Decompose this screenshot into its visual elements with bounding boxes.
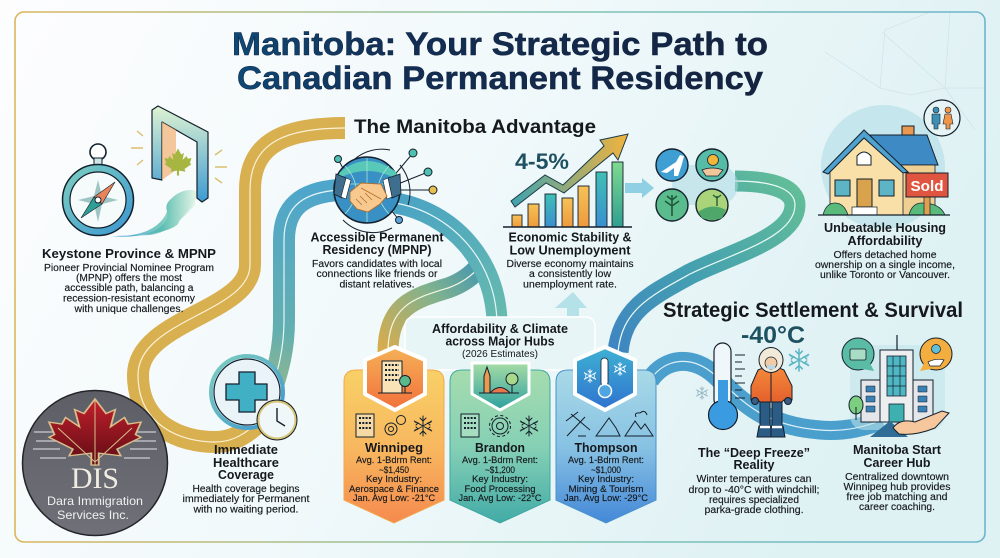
icon: house sold xyxy=(818,100,960,229)
text: Deep Freeze Reality: Reality xyxy=(734,458,775,472)
text: Economic Stability: unemployment rate. xyxy=(523,280,617,290)
text: Immediate Healthcare Coverage: Healthcare xyxy=(213,456,279,470)
icon: career hub building xyxy=(842,335,952,437)
text: Keystone Province & MPNP: with unique challenges. xyxy=(73,304,184,315)
icon: healthcare cross and clock xyxy=(211,356,297,440)
panel: hubs header xyxy=(405,317,595,370)
icon: handshake globe xyxy=(334,149,437,233)
text: Deep Freeze Reality: The “Deep Freeze” xyxy=(698,446,810,460)
text: Manitoba Start Career Hub: Centralized downtown xyxy=(845,472,949,483)
text: Accessible Permanent Residency: Residency (MPNP) xyxy=(322,243,432,257)
text: Thompson facts: Avg. 1-Bdrm Rent: xyxy=(568,455,644,466)
text: Unbeatable Housing Affordability: Affordability xyxy=(848,234,923,248)
text: Accessible Permanent Residency xyxy=(310,230,444,290)
text: Thompson facts: Mining & Tourism xyxy=(568,484,644,495)
text: Manitoba Start Career Hub xyxy=(844,443,950,513)
text: Manitoba Start Career Hub: Manitoba Start xyxy=(853,443,942,457)
text: Unbeatable Housing Affordability: Offers detached home xyxy=(834,250,937,261)
text: Economic Stability xyxy=(506,230,634,290)
text: Manitoba Start Career Hub: free job matching and xyxy=(846,492,948,503)
icon: Winnipeg tower xyxy=(378,361,412,393)
text: Thompson facts: Key Industry: xyxy=(578,474,634,485)
panel: Thompson xyxy=(556,347,656,523)
text: Immediate Healthcare Coverage: Immediate xyxy=(214,443,278,457)
icons: Brandon row xyxy=(461,414,538,437)
text: Deep Freeze Reality xyxy=(688,446,820,516)
text: Brandon facts: Brandon xyxy=(475,440,525,455)
text: Keystone Province & MPNP: recession-resistant economy xyxy=(63,294,195,304)
text: Thompson facts: ~$1,000 xyxy=(591,465,621,476)
text: Accessible Permanent Residency: distant relatives. xyxy=(340,280,414,290)
text: Accessible Permanent Residency: Favors candidates with local xyxy=(312,259,442,270)
text: Deep Freeze Reality: parka-grade clothing. xyxy=(704,505,804,516)
panel: hubs header: Affordability & Climate xyxy=(432,321,568,336)
icons: Winnipeg row xyxy=(356,414,432,437)
text: Deep Freeze Reality: drop to -40°C with windchill; xyxy=(688,485,820,496)
arrow: toward industry icons xyxy=(625,178,654,198)
road: gold path xyxy=(138,128,345,442)
text: Keystone Province & MPNP xyxy=(42,247,216,315)
icons: Thompson row xyxy=(566,411,653,436)
logo: Dara Immigration Services: Services Inc. xyxy=(57,508,129,522)
road: central teal path xyxy=(395,203,497,325)
text: Unbeatable Housing Affordability: ownership on a single income, xyxy=(815,260,955,271)
text: Immediate Healthcare Coverage xyxy=(182,443,310,516)
road: lower blue path xyxy=(650,361,882,431)
text: Thompson facts xyxy=(564,440,648,504)
road: olive connector xyxy=(388,266,480,352)
text: Manitoba Start Career Hub: career coaching. xyxy=(859,502,935,513)
text: Deep Freeze Reality: Winter temperatures can xyxy=(696,474,812,485)
text: Accessible Permanent Residency: Accessible Permanent xyxy=(310,230,444,244)
logo: Dara Immigration Services xyxy=(22,390,168,536)
text: Winnipeg facts: Avg. 1-Bdrm Rent: xyxy=(356,455,432,466)
text: Winnipeg facts: Key Industry: xyxy=(366,474,422,485)
logo: Dara Immigration Services: Dara Immigration xyxy=(47,494,143,508)
icon: house sold: Sold xyxy=(910,178,944,195)
text: Winnipeg facts: ~$1,450 xyxy=(379,465,409,476)
heading: The Manitoba Advantage: The Manitoba Advantage xyxy=(354,117,596,138)
icon: thermometer and parka figure xyxy=(697,322,809,437)
text: Immediate Healthcare Coverage: immediately for Permanent xyxy=(182,494,310,505)
text: Keystone Province & MPNP: Keystone Province & MPNP xyxy=(42,247,216,261)
text: Economic Stability: Economic Stability & xyxy=(508,230,632,244)
icon: compass and gateway xyxy=(62,106,227,237)
title xyxy=(232,26,768,96)
text: Unbeatable Housing Affordability: unlike Toronto or Vancouver. xyxy=(820,270,950,281)
text: Keystone Province & MPNP: (MPNP) offers the most xyxy=(76,273,182,284)
chart: rising bars and arrow xyxy=(503,134,632,227)
icons: industry circles xyxy=(656,149,738,221)
chart: rising bars and arrow: 4-5% xyxy=(515,149,569,174)
text: Manitoba Start Career Hub: Winnipeg hub provides xyxy=(844,482,950,493)
panel: hubs header: (2026 Estimates) xyxy=(462,349,538,360)
text: Immediate Healthcare Coverage: Health coverage begins xyxy=(192,484,300,495)
text: Brandon facts: ~$1,200 xyxy=(485,465,515,476)
panel: hubs header: across Major Hubs xyxy=(446,334,554,348)
heading: Strategic Settlement & Survival: Strategic Settlement & Survival xyxy=(663,299,963,322)
text: Brandon facts: Jan. Avg Low: -22°C xyxy=(458,493,542,504)
road: blue path to handshake xyxy=(270,190,340,395)
icon: Brandon skyline xyxy=(479,367,519,393)
text: Brandon facts xyxy=(458,440,542,504)
text: Economic Stability: a consistently low xyxy=(529,269,612,280)
text: Deep Freeze Reality: requires specialized xyxy=(709,495,799,506)
panel: Brandon xyxy=(450,363,550,523)
text: Thompson facts: Thompson xyxy=(574,440,638,455)
text: Unbeatable Housing Affordability: Unbeatable Housing xyxy=(824,221,946,235)
text: Immediate Healthcare Coverage: Coverage xyxy=(218,468,274,482)
logo: Dara Immigration Services: DIS xyxy=(71,462,119,495)
road: right blue-green path xyxy=(618,181,795,352)
text: Economic Stability: Diverse economy maintains xyxy=(506,259,634,270)
text: Economic Stability: Low Unemployment xyxy=(510,244,631,258)
text: Brandon facts: Food Processing xyxy=(464,484,536,495)
icon: thermometer and parka figure: -40°C xyxy=(741,322,805,349)
text: Brandon facts: Key Industry: xyxy=(472,474,528,485)
title: Manitoba: Your Strategic Path to xyxy=(232,26,768,62)
text: Keystone Province & MPNP: Pioneer Provincial Nominee Program xyxy=(44,263,214,274)
text: Winnipeg facts: Aerospace & Finance xyxy=(349,484,439,495)
icon: Thompson thermometer xyxy=(584,358,626,398)
text: Unbeatable Housing Affordability xyxy=(815,221,955,281)
arrow: pale up arrow xyxy=(555,292,587,316)
text: Winnipeg facts: Jan. Avg Low: -21°C xyxy=(353,493,435,504)
text: Manitoba Start Career Hub: Career Hub xyxy=(864,456,931,470)
text: Brandon facts: Avg. 1-Bdrm Rent: xyxy=(462,455,538,466)
text: Winnipeg facts xyxy=(349,440,439,504)
text: Immediate Healthcare Coverage: with no waiting period. xyxy=(192,504,298,516)
text: Accessible Permanent Residency: connections like friends or xyxy=(316,269,438,280)
text: Keystone Province & MPNP: accessible path, balancing a xyxy=(64,283,194,294)
text: Thompson facts: Jan. Avg Low: -29°C xyxy=(564,493,648,504)
title: Canadian Permanent Residency xyxy=(237,60,763,96)
panel: Winnipeg xyxy=(344,347,444,523)
text: Winnipeg facts: Winnipeg xyxy=(365,440,423,455)
